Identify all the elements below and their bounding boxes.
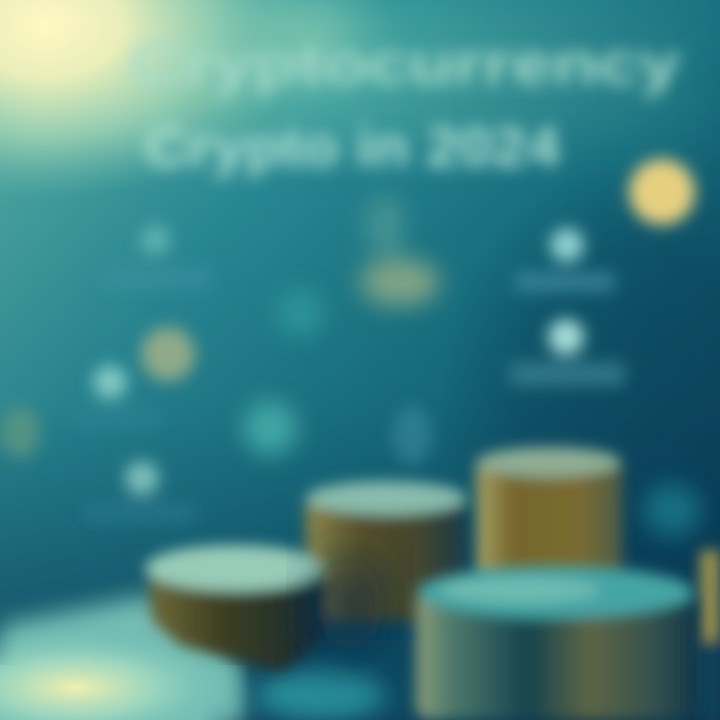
coin stack: front right bbox=[416, 566, 696, 720]
icon: golden coin top right bbox=[629, 159, 695, 225]
icon and label: upper right bbox=[515, 228, 615, 292]
coin stack: front left bbox=[145, 545, 325, 672]
coin stack: far right bbox=[695, 550, 720, 720]
icon: triangle centre bbox=[360, 195, 440, 306]
title line 2: Crypto in 2024 bbox=[145, 115, 560, 178]
coin stack: centre bbox=[306, 481, 466, 620]
icon and label: mid right bbox=[510, 319, 625, 386]
icon: teal dot lower right bbox=[644, 484, 700, 536]
icon: teal dot lower centre bbox=[243, 401, 297, 455]
icon and label: lower left bbox=[85, 461, 195, 524]
floor light pool bbox=[0, 595, 430, 720]
icon: faded gold dot far left bbox=[0, 406, 40, 458]
title line 1: Cryptocurrency bbox=[130, 32, 680, 97]
icon and label: left bbox=[75, 365, 160, 428]
icon: faded figure lower centre bbox=[392, 405, 432, 465]
dark shadow between stacks bbox=[318, 555, 382, 655]
light glow top left bbox=[0, 0, 305, 200]
icon and label: upper left bbox=[105, 225, 210, 288]
icon: golden dot left bbox=[141, 327, 195, 381]
coin stack: back right bbox=[476, 447, 622, 580]
icon: teal dot centre bbox=[276, 289, 324, 337]
title bbox=[130, 32, 680, 178]
